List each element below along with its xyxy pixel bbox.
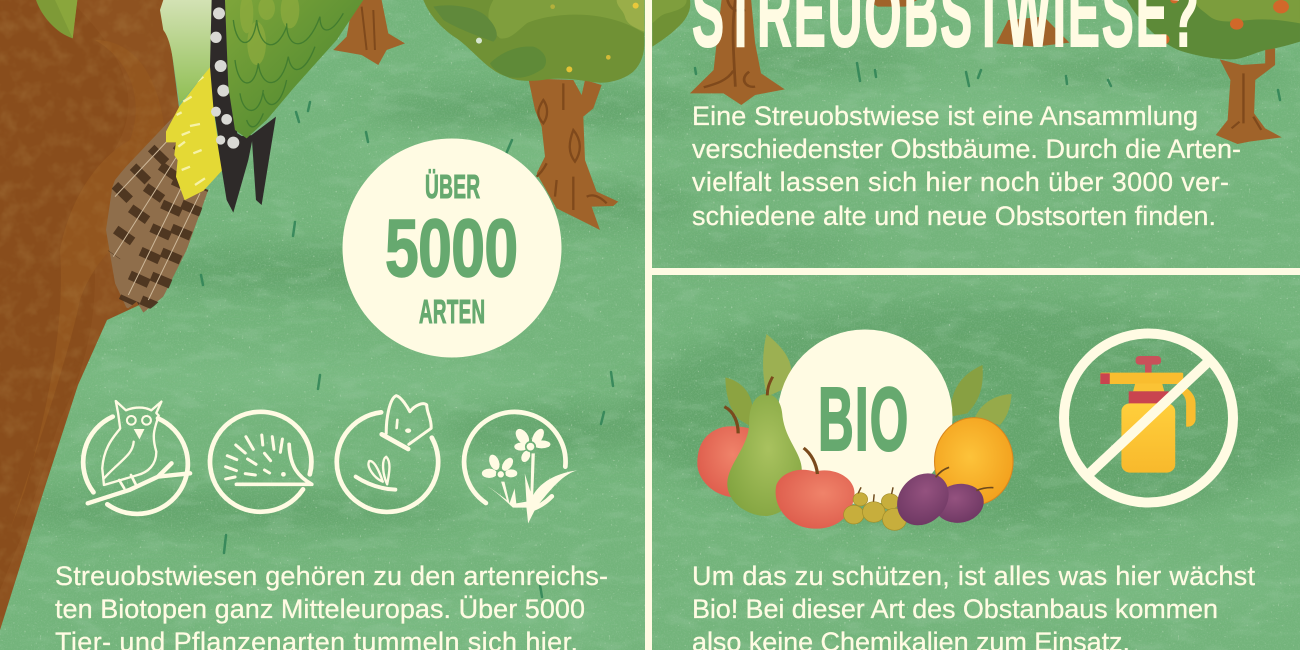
icon: hedgehog [210, 412, 312, 512]
front apple [776, 470, 855, 529]
icon: owl [83, 401, 190, 514]
bio circle [778, 330, 952, 504]
small yellow plums [844, 493, 907, 530]
apple tree right panel [1127, 0, 1300, 144]
icon: flowers [464, 412, 577, 523]
black strip with white spots [210, 0, 248, 148]
pear [727, 394, 802, 516]
divider lines [645, 0, 1300, 650]
background tree small trunk [333, 0, 405, 65]
tree crown across divider [652, 0, 690, 47]
green wing with feathers [225, 0, 363, 138]
circle badge: über 5000 arten [342, 138, 562, 358]
woodpecker bird [106, 0, 363, 313]
text: organic paragraph [692, 561, 1255, 650]
badge text arten: ARTEN [419, 294, 485, 330]
text: definition paragraph: verschiedenster Obstbäume. Durch die Arten- [692, 134, 1241, 164]
tree trunk foreground left panel [528, 78, 618, 230]
fruits [697, 377, 1013, 534]
icon: no pesticide sprayer [1064, 334, 1233, 502]
sprayer [1100, 356, 1196, 473]
tree trunk right panel middle [866, 0, 1069, 47]
tree crown left panel [423, 0, 644, 83]
tail feathers barred [106, 115, 208, 313]
text: species paragraph [55, 561, 608, 650]
black tail points [217, 135, 253, 213]
text: organic paragraph: Um das zu schützen, ist alles was hier wächst [692, 561, 1255, 591]
orange [935, 418, 1013, 505]
tree trunk with bark [0, 0, 179, 630]
yellow rump [167, 67, 222, 199]
back apple [697, 426, 756, 497]
tree trunk right panel left [690, 0, 785, 105]
badge text über: ÜBER [425, 169, 480, 205]
text: definition paragraph: schiedene alte und neue Obstsorten finden. [692, 201, 1216, 231]
text: definition paragraph: Eine Streuobstwiese ist eine Ansammlung [692, 101, 1198, 131]
text: definition paragraph [692, 101, 1241, 231]
pale belly [160, 0, 213, 103]
grass blades [201, 63, 1280, 597]
text: species paragraph: Streuobstwiesen gehören zu den artenreichs- [55, 561, 608, 591]
text: species paragraph: ten Biotopen ganz Mitteleuropas. Über 5000 [55, 594, 585, 624]
plums [930, 479, 989, 528]
text: definition paragraph: vielfalt lassen sich hier noch über 3000 ver- [692, 167, 1229, 197]
bio label: BIO [818, 369, 908, 470]
badge number: 5000 [385, 203, 518, 294]
prohibition ring [1064, 334, 1233, 502]
leaf top left [36, 0, 77, 38]
leaves [725, 334, 1012, 427]
icon: butterfly [337, 396, 438, 512]
text: organic paragraph: Bio! Bei dieser Art des Obstanbaus kommen [692, 594, 1218, 624]
icon: bio fruits [697, 330, 1013, 534]
